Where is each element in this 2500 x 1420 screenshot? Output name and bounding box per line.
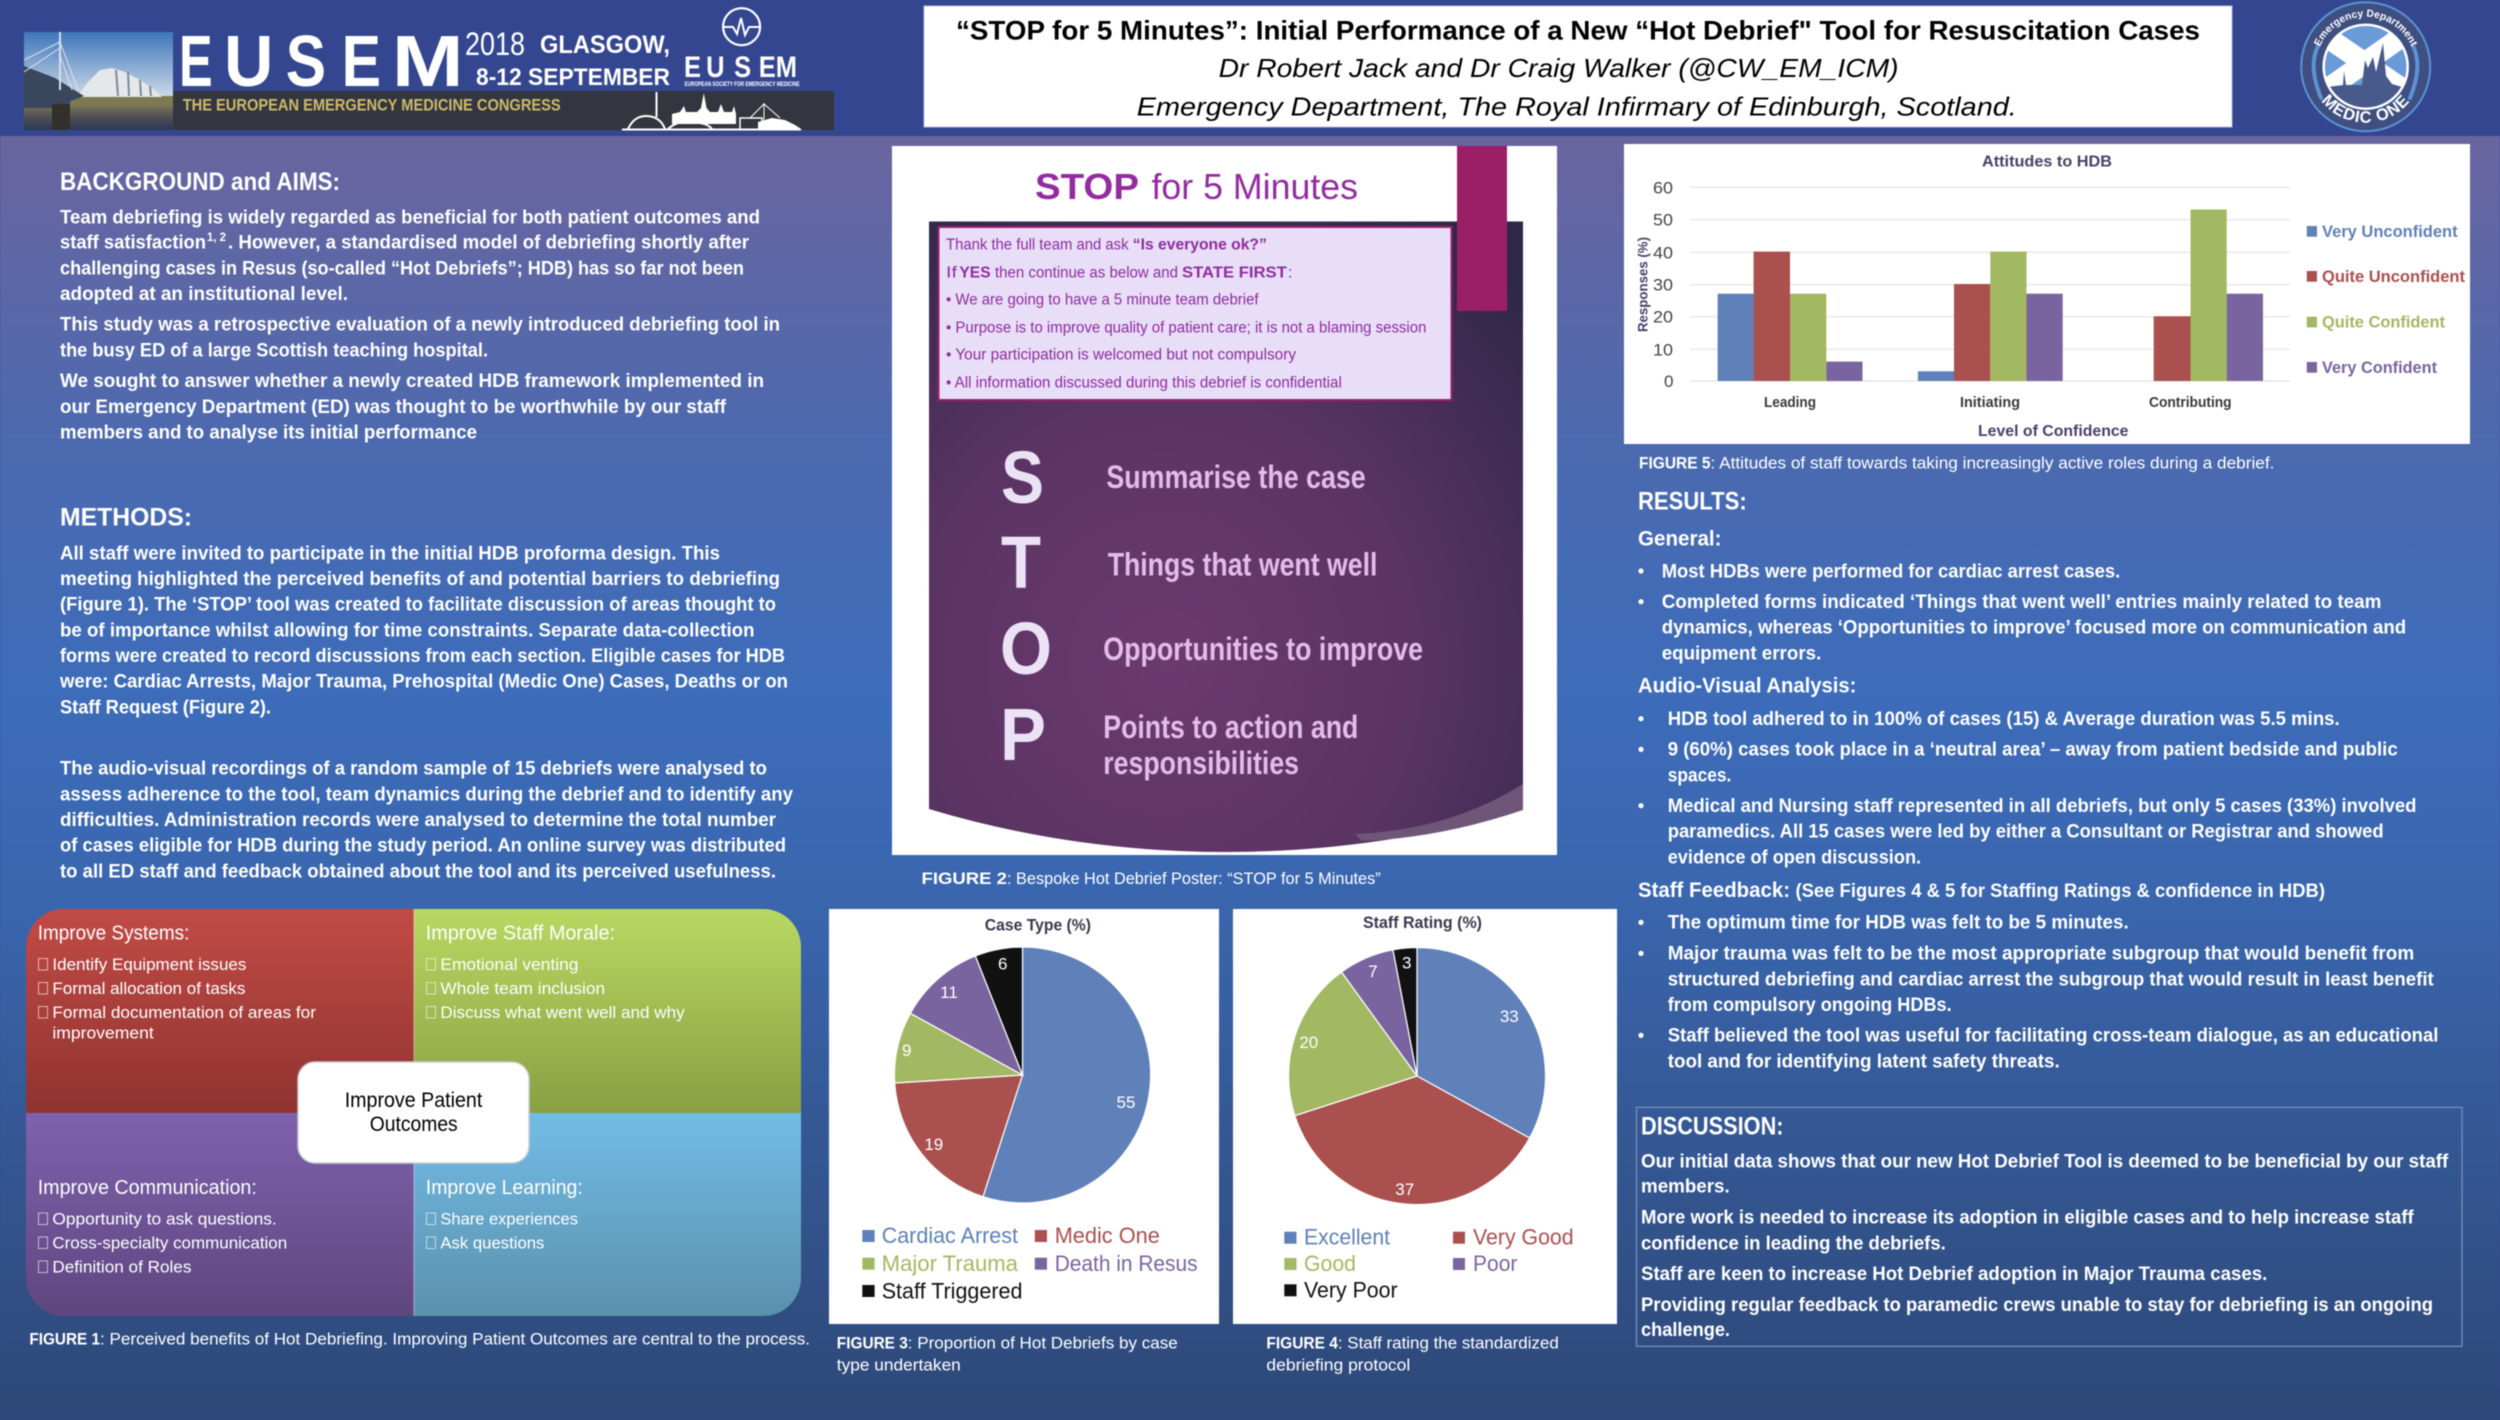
bullets: audio-visual analysis: evidence of open discussion. xyxy=(1668,846,1921,868)
P: points to action xyxy=(1000,693,1358,781)
pie value labels: 55 xyxy=(1117,1093,1135,1112)
bullets: audio-visual analysis xyxy=(1638,708,2416,868)
panel: methods xyxy=(59,504,793,882)
y axis labels: 30 xyxy=(1653,276,1673,295)
y axis labels: 40 xyxy=(1653,243,1673,262)
text block: discussion: More work is needed to increase its adoption in eligible cases and to help increase staff xyxy=(1641,1207,2414,1229)
pie legend: Death in Resus xyxy=(1055,1251,1198,1276)
y axis labels: 0 xyxy=(1664,372,1674,391)
poster instruction box: • Purpose is to improve quality of patient care; it is not a blaming session xyxy=(946,319,1426,336)
bullets: staff feedback: The optimum time for HDB was felt to be 5 minutes. xyxy=(1668,912,2129,934)
text block: aims: We sought to answer whether a newly created HDB framework implemented in xyxy=(60,370,764,392)
congress location: GLASGOW, xyxy=(540,31,670,59)
pie title: Staff Rating (%) xyxy=(1363,913,1482,932)
pie value labels: 3 xyxy=(1402,954,1411,972)
EUSEM large letters: U xyxy=(224,20,273,101)
subheading: audio-visual analysis: Audio-Visual Analysis: xyxy=(1638,675,1856,698)
figure 4 caption xyxy=(1266,1333,1559,1375)
chart legend: Quite Unconfident xyxy=(2322,267,2465,286)
text block: methods analysis: assess adherence to the tool, team dynamics during the debrief and to identify any xyxy=(60,783,793,805)
poster heading xyxy=(1035,166,1358,207)
quadrant: improve systems: Formal allocation of tasks xyxy=(52,979,245,998)
text block: study description xyxy=(60,314,780,361)
bullets: general: dynamics, whereas ‘Opportunities to improve’ focused more on communication and xyxy=(1662,617,2406,639)
Medic One logo: Emergency Department xyxy=(2313,8,2418,48)
figure 1: benefits quadrant diagram xyxy=(26,909,801,1316)
figure 3 caption: FIGURE 3 xyxy=(837,1333,908,1352)
poster instruction box: Thank the full team and ask xyxy=(946,236,1129,253)
authors: Dr Robert Jack and Dr Craig Walker (@CW_EM_ICM) xyxy=(1219,53,1899,83)
text block: methods design: be of importance whilst allowing for time constraints. Separate data-collection xyxy=(60,619,754,641)
pie value labels: 37 xyxy=(1395,1180,1414,1199)
quadrant: improve learning xyxy=(426,1177,583,1253)
banner dark strip xyxy=(173,91,834,130)
centre box: improve patient outcomes xyxy=(298,1062,529,1163)
T: things that went well: T xyxy=(1001,521,1041,604)
Glasgow skyline xyxy=(622,92,801,130)
pie slices xyxy=(1289,948,1546,1205)
text block: methods design: All staff were invited to participate in the initial HDB proforma design. This xyxy=(60,542,720,564)
text block: background: staff satisfaction xyxy=(60,232,206,254)
pie slices xyxy=(894,947,1151,1203)
text block: background: challenging cases in Resus (so-called “Hot Debriefs”; HDB) has so far not been xyxy=(60,257,744,279)
bars: leading xyxy=(1718,252,1862,381)
pie legend: Very Poor xyxy=(1304,1278,1398,1303)
T: things that went well xyxy=(1001,521,1377,604)
quadrant: improve staff morale: Whole team inclusion xyxy=(440,979,605,998)
text block: background: adopted at an institutional level. xyxy=(60,283,348,305)
figure 3 caption xyxy=(837,1333,1178,1375)
poster instruction box: : xyxy=(1288,264,1292,281)
y axis labels xyxy=(1653,178,1674,391)
title box xyxy=(924,6,2232,127)
poster instruction box: then continue as below and xyxy=(995,264,1178,281)
chart legend xyxy=(2307,222,2465,377)
poster instruction box: • We are going to have a 5 minute team debrief xyxy=(946,291,1259,308)
Medic One logo: MEDIC ONE xyxy=(2321,93,2410,124)
quadrant: improve systems: Identify Equipment issues xyxy=(52,955,246,974)
heading: results: RESULTS: xyxy=(1638,487,1747,515)
x axis title: Level of Confidence xyxy=(1978,423,2129,440)
bullets: staff feedback: Major trauma was felt to be the most appropriate subgroup that would benefit from xyxy=(1668,943,2414,965)
subheading: staff feedback: (See Figures 4 & 5 for Staffing Ratings & confidence in HDB) xyxy=(1796,880,2325,902)
bullets: staff feedback: structured debriefing and cardiac arrest the subgroup that would result in least benefit xyxy=(1668,968,2434,990)
poster instruction box xyxy=(938,227,1452,400)
text block: methods analysis: of cases eligible for HDB during the study period. An online survey was distributed xyxy=(60,835,786,857)
bullets: staff feedback: tool and for identifying latent safety threats. xyxy=(1668,1050,2060,1072)
EUSEM society logo: EUROPEAN SOCIETY FOR EMERGENCY MEDICINE xyxy=(685,82,800,88)
bullets: audio-visual analysis: Medical and Nursing staff represented in all debriefs, but only 5 cases (33%) involved xyxy=(1668,795,2416,817)
quadrant: improve learning: Share experiences xyxy=(440,1210,578,1229)
text block: background: Team debriefing is widely regarded as beneficial for both patient outcomes and xyxy=(60,206,760,228)
text block: background: . However, a standardised model of debriefing shortly after xyxy=(228,232,749,254)
O: opportunities to improve: Opportunities to improve xyxy=(1103,631,1423,667)
EUSEM large letters: S xyxy=(286,22,326,102)
subheading: general: General: xyxy=(1638,527,1722,550)
text block: discussion: Staff are keen to increase Hot Debrief adoption in Major Trauma cases. xyxy=(1641,1263,2267,1285)
figure 2 caption: : Bespoke Hot Debrief Poster: “STOP for 5 Minutes” xyxy=(1007,869,1381,888)
O: opportunities to improve: O xyxy=(1000,607,1052,690)
quadrant: improve staff morale: Discuss what went well and why xyxy=(440,1003,685,1022)
chart legend: Very Unconfident xyxy=(2322,222,2458,241)
y axis labels: 20 xyxy=(1653,308,1673,327)
text block: methods design: forms were created to record discussions from each section. Eligible cases for HDB xyxy=(60,645,785,667)
poster instruction box: • All information discussed during this debrief is confidential xyxy=(946,375,1342,392)
text block: discussion: confidence in leading the debriefs. xyxy=(1641,1232,1946,1254)
figure 5 caption: FIGURE 5 xyxy=(1639,453,1710,472)
pie title: Case Type (%) xyxy=(985,916,1091,935)
text block: discussion: Providing regular feedback to paramedic crews unable to stay for debriefing is an ongoing xyxy=(1641,1294,2433,1316)
P: points to action: P xyxy=(1000,693,1046,776)
text block: study description: This study was a retrospective evaluation of a newly introduced debriefing tool in xyxy=(60,314,780,336)
header band xyxy=(0,0,2500,136)
text block: study description: the busy ED of a large Scottish teaching hospital. xyxy=(60,339,488,361)
quadrant: improve learning: Improve Learning: xyxy=(426,1177,583,1199)
chart legend: Very Confident xyxy=(2322,358,2437,377)
text block: methods design: (Figure 1). The ‘STOP’ tool was created to facilitate discussion of areas thought to xyxy=(60,594,776,616)
pie value labels xyxy=(1299,954,1519,1199)
x axis labels xyxy=(1764,394,2232,411)
heading: methods: METHODS: xyxy=(60,504,192,532)
figure 3 caption: type undertaken xyxy=(837,1356,961,1375)
text block: methods analysis xyxy=(60,758,793,882)
quadrant: improve communication: Cross-specialty communication xyxy=(52,1234,287,1253)
pie legend: Medic One xyxy=(1055,1223,1160,1248)
pie legend: Cardiac Arrest xyxy=(882,1223,1018,1248)
EUSEM congress banner xyxy=(24,8,834,130)
centre box: improve patient outcomes: Outcomes xyxy=(370,1113,458,1136)
pie value labels: 9 xyxy=(902,1041,911,1060)
text block: aims xyxy=(60,370,764,443)
figure 4: staff rating pie chart xyxy=(1233,909,1617,1324)
x axis labels: Contributing xyxy=(2149,394,2232,411)
text block: aims: members and to analyse its initial performance xyxy=(60,421,477,443)
EUSEM society logo: EUSEM xyxy=(684,50,797,83)
quadrant: improve systems: Improve Systems: xyxy=(38,922,189,944)
quadrant: improve communication xyxy=(38,1177,287,1277)
bars: initiating xyxy=(1918,252,2063,381)
quadrant: improve staff morale: Emotional venting xyxy=(440,955,578,974)
EUSEM large letters: E xyxy=(179,22,213,102)
bullets: staff feedback: Staff believed the tool was useful for facilitating cross-team dialogue, as an educational xyxy=(1668,1025,2438,1047)
text block: background xyxy=(60,206,760,305)
y axis labels: 60 xyxy=(1653,178,1673,197)
text block: aims: our Emergency Department (ED) was thought to be worthwhile by our staff xyxy=(60,396,726,418)
pie legend: Poor xyxy=(1473,1251,1517,1276)
congress dates: 8-12 SEPTEMBER xyxy=(476,64,670,91)
poster instruction box: If xyxy=(946,264,958,281)
pie legend: Very Good xyxy=(1473,1224,1574,1249)
pie value labels: 20 xyxy=(1299,1033,1318,1052)
text block: methods analysis: The audio-visual recordings of a random sample of 15 debriefs were analysed to xyxy=(60,758,767,780)
figure 5 caption: : Attitudes of staff towards taking increasingly active roles during a debrief. xyxy=(1710,453,2274,472)
figure 3 caption: : Proportion of Hot Debriefs by case xyxy=(908,1333,1178,1352)
figure 4 caption: debriefing protocol xyxy=(1266,1356,1410,1375)
pie value labels: 6 xyxy=(998,954,1007,974)
panel: discussion xyxy=(1636,1107,2462,1346)
pie legend: Major Trauma xyxy=(882,1251,1019,1276)
text block: methods analysis: difficulties. Administration records were analysed to determine the total number xyxy=(60,809,776,831)
P: points to action: responsibilities xyxy=(1103,745,1299,781)
text block: methods analysis: to all ED staff and feedback obtained about the tool and its perceived usefulness. xyxy=(60,860,776,882)
pie legend: Excellent xyxy=(1304,1224,1390,1249)
S: summarise the case: S xyxy=(1001,436,1044,519)
congress tagline: THE EUROPEAN EMERGENCY MEDICINE CONGRESS xyxy=(183,96,561,115)
figure 2 caption: FIGURE 2 xyxy=(922,869,1007,888)
EUSEM large letters: M xyxy=(392,21,464,101)
y axis labels: 10 xyxy=(1653,340,1673,359)
quadrant: improve staff morale: Improve Staff Morale: xyxy=(426,922,615,944)
bullets: staff feedback xyxy=(1638,912,2438,1072)
chart legend: Quite Confident xyxy=(2322,313,2445,332)
text block: methods design: were: Cardiac Arrests, Major Trauma, Prehospital (Medic One) Cases, Deaths or on xyxy=(59,671,788,693)
pie value labels: 7 xyxy=(1368,962,1378,981)
x axis labels: Leading xyxy=(1764,394,1816,411)
bullets: general: equipment errors. xyxy=(1662,642,1821,664)
poster dark shape xyxy=(929,222,1523,852)
poster instruction box: “Is everyone ok?” xyxy=(1133,236,1267,253)
panel: background and aims xyxy=(60,168,780,443)
pie legend xyxy=(1284,1224,1574,1303)
poster instruction box: YES xyxy=(959,264,991,281)
pie value labels: 19 xyxy=(924,1135,943,1154)
poster heading: STOP xyxy=(1035,166,1139,207)
S: summarise the case xyxy=(1001,436,1366,519)
pie legend: Staff Triggered xyxy=(882,1279,1022,1304)
bullets: audio-visual analysis: spaces. xyxy=(1668,764,1731,786)
figure 1 caption: FIGURE 1 xyxy=(29,1329,100,1348)
bullets: audio-visual analysis: paramedics. All 15 cases were led by either a Consultant or Registrar and showed xyxy=(1668,821,2384,843)
figure 5: attitudes bar chart xyxy=(1624,144,2470,444)
quadrant: improve systems: Formal documentation of areas for xyxy=(52,1003,316,1022)
banner photo xyxy=(24,32,173,130)
poster accent bar xyxy=(1457,146,1507,311)
subheading: staff feedback: Staff Feedback: xyxy=(1638,879,1790,902)
quadrant: improve communication: Improve Communication: xyxy=(38,1177,257,1199)
bullets: general: Most HDBs were performed for cardiac arrest cases. xyxy=(1662,560,2120,582)
poster instruction box: • Your participation is welcomed but not compulsory xyxy=(946,347,1296,364)
text block: methods design: meeting highlighted the perceived benefits of and potential barriers to debriefing xyxy=(60,568,780,590)
figure 1 caption: : Perceived benefits of Hot Debriefing. Improving Patient Outcomes are central to the process. xyxy=(100,1329,810,1348)
poster instruction box: STATE FIRST xyxy=(1182,264,1287,281)
centre box: improve patient outcomes: Improve Patient xyxy=(345,1089,482,1112)
heading: discussion: DISCUSSION: xyxy=(1641,1112,1784,1140)
P: points to action: Points to action and xyxy=(1103,709,1358,745)
bullets: general xyxy=(1638,560,2406,664)
poster title: “STOP for 5 Minutes”: Initial Performance of a New “Hot Debrief" Tool for Resuscitation Cases xyxy=(956,15,2200,45)
Medic One logo xyxy=(2300,0,2432,133)
T: things that went well: Things that went well xyxy=(1108,546,1377,582)
heading: background and aims: BACKGROUND and AIMS: xyxy=(60,168,340,196)
bullets: staff feedback: from compulsory ongoing HDBs. xyxy=(1668,994,1952,1016)
quadrant: improve systems: improvement xyxy=(52,1023,154,1042)
y axis labels: 50 xyxy=(1653,211,1673,230)
text block: methods design: Staff Request (Figure 2). xyxy=(60,696,271,718)
figure 4 caption: FIGURE 4 xyxy=(1266,1333,1338,1352)
pie legend xyxy=(862,1223,1198,1304)
EUSEM large letters xyxy=(179,20,464,102)
quadrant: improve staff morale xyxy=(426,922,685,1022)
text block: discussion: Our initial data shows that our new Hot Debrief Tool is deemed to be beneficial by our staff xyxy=(1641,1150,2449,1172)
text block: discussion: members. xyxy=(1641,1176,1730,1198)
affiliation: Emergency Department, The Royal Infirmary of Edinburgh, Scotland. xyxy=(1137,92,2017,122)
poster heading: for 5 Minutes xyxy=(1152,166,1358,207)
figure 2: STOP poster xyxy=(892,146,1557,855)
pie value labels: 11 xyxy=(940,983,958,1002)
figure 3: case type pie chart xyxy=(829,909,1219,1324)
bullets: general: Completed forms indicated ‘Things that went well’ entries mainly related to team xyxy=(1662,591,2381,613)
figure 4 caption: : Staff rating the standardized xyxy=(1338,1333,1559,1352)
S: summarise the case: Summarise the case xyxy=(1106,459,1366,495)
text block: background: 1, 2 xyxy=(207,230,226,244)
O: opportunities to improve xyxy=(1000,607,1423,690)
panel: results xyxy=(1638,487,2438,1072)
quadrant: improve learning: Ask questions xyxy=(440,1234,544,1253)
text block: discussion: challenge. xyxy=(1641,1319,1730,1341)
bars: contributing xyxy=(2154,210,2263,381)
pie legend: Good xyxy=(1304,1251,1356,1276)
quadrant: improve communication: Definition of Roles xyxy=(52,1258,191,1277)
bullets: audio-visual analysis: 9 (60%) cases took place in a ‘neutral area’ – away from patient bedside and public xyxy=(1668,739,2398,761)
text block: methods design xyxy=(59,542,788,718)
x axis labels: Initiating xyxy=(1960,394,2020,411)
pie value labels xyxy=(902,954,1135,1154)
quadrant: improve systems xyxy=(38,922,316,1042)
bullets: audio-visual analysis: HDB tool adhered to in 100% of cases (15) & Average duration was 5.5 mins. xyxy=(1668,708,2340,730)
pie value labels: 33 xyxy=(1500,1007,1519,1026)
quadrant: improve communication: Opportunity to ask questions. xyxy=(52,1210,277,1229)
text block: discussion xyxy=(1641,1150,2449,1341)
congress year: 2018 xyxy=(465,26,525,62)
EUSEM society logo xyxy=(684,8,800,88)
chart title: Attitudes to HDB xyxy=(1982,154,2112,171)
EUSEM large letters: E xyxy=(342,20,381,101)
y axis title: Responses (%) xyxy=(1635,237,1650,332)
